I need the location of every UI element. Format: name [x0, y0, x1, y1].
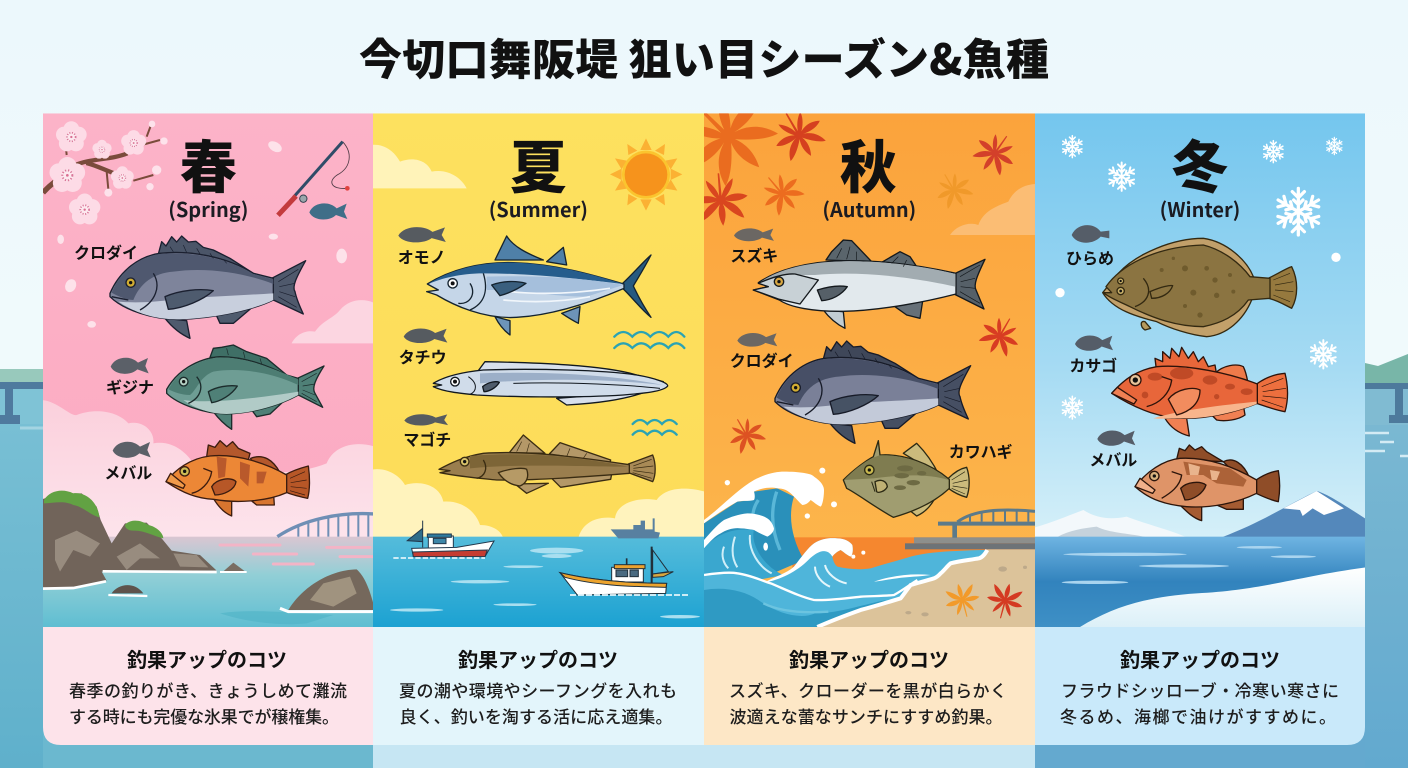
- fish: bonito: [427, 236, 651, 335]
- panel: autumn tips: [704, 627, 1035, 745]
- snowflakes: [1055, 136, 1343, 419]
- season name winter: (Winter): [1160, 194, 1240, 223]
- bridge: [938, 510, 1035, 538]
- fish: black porgy: [110, 236, 306, 338]
- panel: winter: [1030, 113, 1367, 627]
- rock right: [280, 569, 375, 612]
- fish label: kasago: カサゴ: [1069, 353, 1117, 377]
- cherry blossom branch: [43, 121, 168, 224]
- distant bridge: [277, 514, 375, 537]
- season name spring: (Spring): [168, 194, 248, 223]
- pier: [905, 537, 1035, 549]
- season kanji winter: 冬: [1172, 123, 1228, 205]
- panel: winter tips: [1035, 627, 1365, 745]
- far ship: [611, 518, 660, 538]
- tips body: スズキ、クローダーを黒が白らかく: [729, 677, 1007, 702]
- sea: [1030, 537, 1367, 627]
- fish label: mebaru: メバル: [1089, 447, 1137, 471]
- snow bank: [1080, 567, 1367, 627]
- bottom strip under panels: [43, 700, 1365, 768]
- silhouette: scorpionfish: [1075, 335, 1113, 351]
- fish label: suzuki: スズキ: [730, 242, 778, 266]
- icon: sun: [610, 138, 682, 211]
- season kanji autumn: 秋: [840, 123, 897, 205]
- horizon: [792, 537, 1035, 574]
- beach: [817, 549, 1035, 627]
- season name autumn: (Autumn): [822, 194, 916, 223]
- fish: filefish: [843, 441, 969, 517]
- silhouette: small fish: [737, 333, 777, 347]
- panel: summer: [370, 113, 705, 627]
- tips body: 冬るめ、海榔で油けがすすめに。: [1060, 703, 1336, 728]
- fish: scorpionfish: [1112, 347, 1287, 436]
- fish label: hirame: ひらめ: [1066, 245, 1114, 269]
- lower clouds: [40, 400, 375, 540]
- mountain right: [1222, 491, 1365, 537]
- fish: flathead: [439, 435, 655, 493]
- panel: summer tips: [373, 627, 704, 745]
- lower clouds: [370, 469, 705, 538]
- silhouette: small fish: [404, 414, 448, 425]
- season kanji summer: 夏: [510, 123, 567, 205]
- great wave: [704, 468, 987, 627]
- fish label: gijina: ギジナ: [106, 374, 154, 398]
- fish: green rudderfish: [167, 345, 324, 429]
- fish: cutlassfish: [433, 362, 668, 405]
- silhouette: seabass: [734, 228, 774, 241]
- fish: flounder: [1103, 238, 1297, 337]
- cloud: [950, 184, 1035, 235]
- fish label: magochi: マゴチ: [403, 427, 451, 451]
- tips body: 夏の潮や環境やシーフングを入れも: [399, 677, 677, 702]
- fish: black porgy: [775, 341, 971, 443]
- silhouette: bonito: [398, 227, 446, 242]
- tips body: 良く、釣いを淘する活に応え適集。: [400, 703, 672, 728]
- leaves on beach: [941, 579, 1027, 623]
- fish label: kurodai: クロダイ: [74, 239, 138, 263]
- panel: autumn: [663, 71, 1037, 627]
- silhouette: small fish: [404, 329, 447, 343]
- backdrop scenery right: hills, bridge, sea: [1365, 354, 1408, 768]
- fish label: kurodai: クロダイ: [730, 347, 794, 371]
- rocks left: [40, 491, 247, 596]
- tips heading: 釣果アップのコツ: [458, 644, 618, 673]
- sea: [370, 537, 705, 627]
- fish: seabass: [753, 240, 985, 328]
- tips heading: 釣果アップのコツ: [1120, 644, 1280, 673]
- silhouette: small fish: [113, 442, 151, 458]
- mountain left: [1035, 510, 1187, 537]
- tips heading: 釣果アップのコツ: [789, 644, 949, 673]
- panel: spring: [40, 113, 375, 627]
- tips body: する時にも完優な氷果でが穣権集。: [69, 703, 339, 728]
- tips heading: 釣果アップのコツ: [127, 644, 287, 673]
- silhouette: rockfish: [1097, 430, 1135, 446]
- fish: rockfish: [1135, 445, 1280, 521]
- petals: [57, 139, 347, 328]
- tips body: フラウドシッローブ・冷寒い寒さに: [1061, 677, 1339, 702]
- icon: fishing rod: [278, 142, 350, 219]
- fish label: mebaru: メバル: [104, 459, 152, 483]
- season kanji spring: 春: [180, 123, 237, 205]
- tips body: 波適えな蕾なサンチにすすめ釣果。: [730, 703, 1002, 728]
- silhouette: small fish: [111, 358, 149, 374]
- top left cloud: [370, 145, 467, 188]
- right cloud: [292, 300, 375, 343]
- sea: [40, 537, 375, 627]
- silhouette: flounder: [1072, 225, 1109, 243]
- title: 今切口舞阪堤 狙い目シーズン&魚種: [359, 26, 1049, 88]
- yellow boat: [560, 547, 673, 595]
- panel: spring tips: [43, 627, 373, 745]
- fish label: kawahagi: カワハギ: [949, 438, 1013, 462]
- fish: rockfish: [166, 441, 310, 516]
- tips body: 春季の釣りがき、きょうしめて灘流: [69, 677, 347, 702]
- backdrop scenery left: hills, bridge, sea: [0, 369, 43, 768]
- season name summer: (Summer): [489, 194, 588, 223]
- waves: [614, 332, 684, 435]
- small red boat: [407, 521, 494, 557]
- fish label: tachiu: タチウ: [399, 344, 447, 368]
- fish label: omono: オモノ: [398, 244, 446, 268]
- leaves top left: [663, 71, 1027, 459]
